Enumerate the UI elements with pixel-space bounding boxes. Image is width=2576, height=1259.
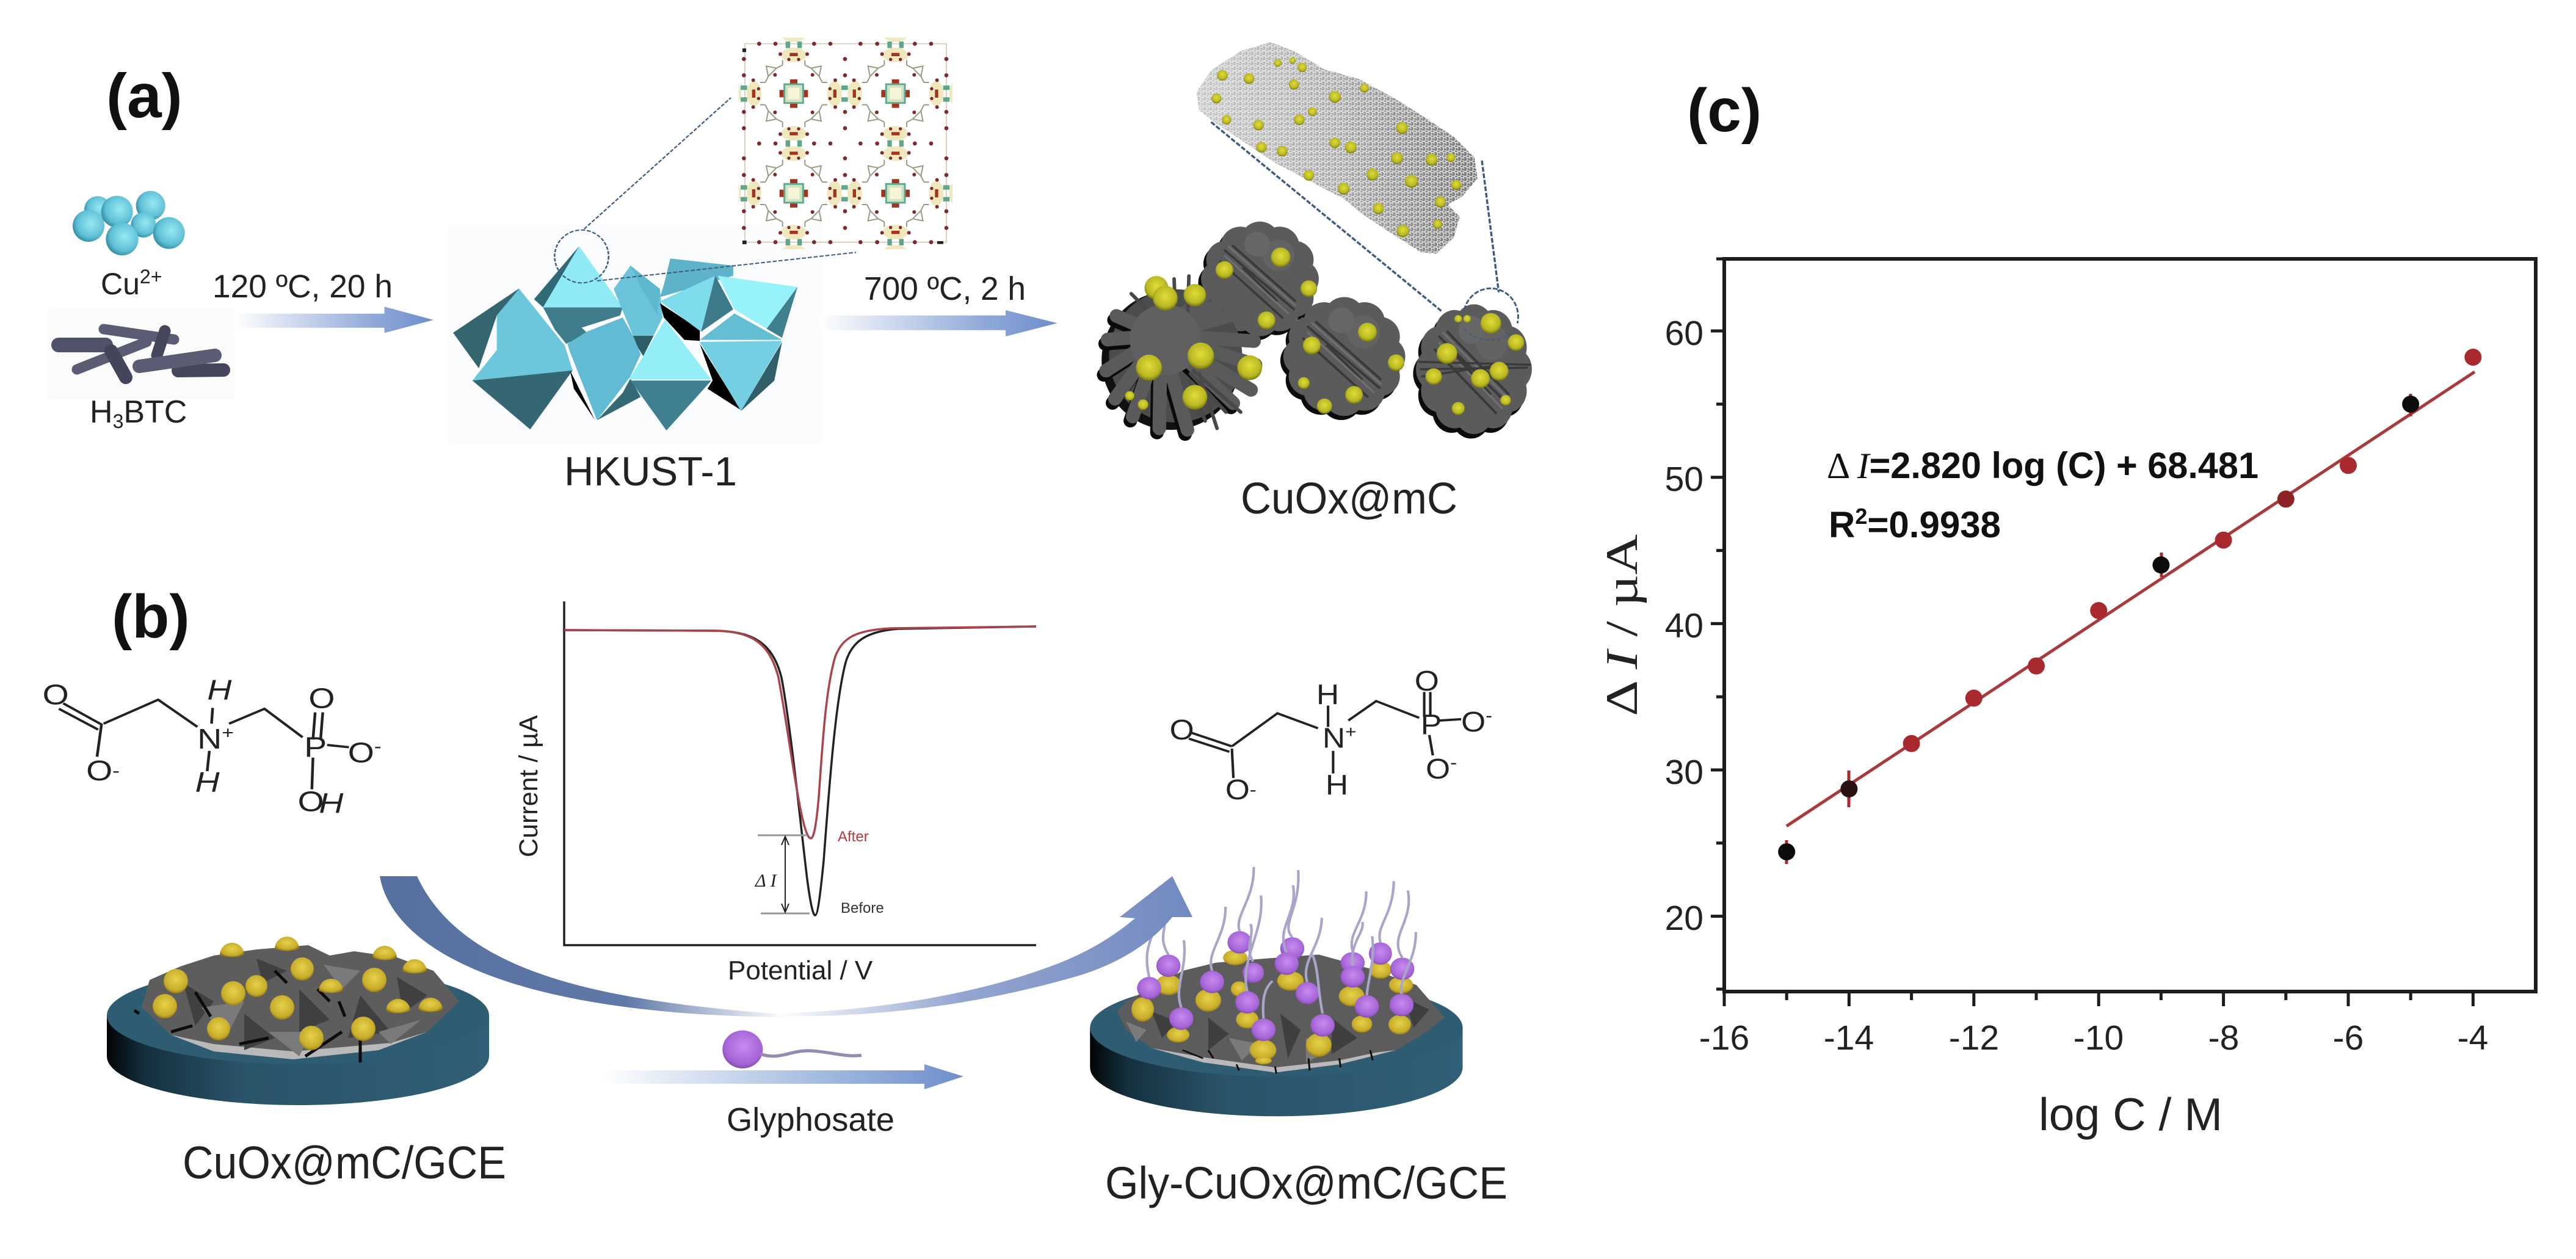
molecule: glyphosate left [43,674,382,819]
x tick labels [1699,1018,2488,1058]
y tick labels: 60 [1665,314,1703,353]
inset: HKUST-1 framework [739,38,952,249]
data points [1778,349,2481,864]
text: H3BTC: BTC [123,394,187,430]
text: HKUST-1: HKUST-1 [564,449,737,495]
x tick labels: -12 [1949,1018,1999,1058]
x tick labels: -4 [2458,1018,2488,1058]
molecule: glyphosate left: H [319,788,344,819]
text: CuOx@mC: CuOx@mC [1241,474,1457,523]
label (a): (a) [106,61,183,131]
text: Glyphosate: Glyphosate [727,1101,894,1138]
chart: voltammogram before and after [514,601,1036,985]
molecule: glyphosate left: P [304,731,327,763]
chart: voltammogram before and after: Current / µA [514,715,543,857]
molecule: glyphosate left: O [43,679,69,710]
callout: zoom lines to inset [554,98,856,283]
arrow: glyphosate step [600,1064,963,1089]
icon: H3BTC rods [46,308,234,399]
molecule: glyphosate right: O [1415,666,1439,697]
equation: Δ I=2.820 log (C) + 68.481 [1827,445,2259,486]
chart: voltammogram before and after: Before [841,900,884,916]
molecule: glyphosate right: - [1250,780,1257,800]
label (c): (c) [1687,76,1761,145]
text: 700 ºC, 2 h: 700 ºC, 2 h [864,270,1026,307]
icon: carbon tube with nanoparticles [1196,42,1478,254]
r squared: =0.9938 [1867,504,2001,545]
icon: glyphosate probe [722,1031,862,1069]
chart: calibration plot [1597,259,2536,1140]
icon: Cu2+ spheres [73,191,185,255]
x tick labels: -8 [2208,1018,2239,1058]
molecule: glyphosate left: O [86,755,112,786]
molecule: glyphosate right: H [1316,680,1339,711]
arrow: step 1 [234,307,434,333]
x tick labels: -6 [2333,1018,2364,1058]
text: H3BTC: 3 [113,410,123,432]
x tick labels: -14 [1824,1018,1874,1058]
molecule: glyphosate right: P [1421,709,1442,741]
x axis title: log C / M [2039,1089,2222,1140]
arrow: curved right with head [775,876,1192,1016]
r squared: R [1829,504,1855,545]
disk: Gly-CuOx@mC/GCE electrode [1090,867,1463,1116]
molecule: glyphosate right [1170,666,1492,805]
label (b): (b) [112,582,190,651]
molecule: glyphosate left: O [308,683,335,714]
molecule: glyphosate right: O [1426,753,1450,785]
molecule: glyphosate left: - [374,736,382,756]
molecule: glyphosate right: O [1225,775,1250,805]
text: 120 ºC, 20 h: 120 ºC, 20 h [212,269,393,305]
disk: CuOx@mC/GCE electrode [107,937,489,1105]
icon: CuOx@mC nanoparticle clusters [1101,122,1532,438]
text: Gly-CuOx@mC/GCE: Gly-CuOx@mC/GCE [1105,1158,1508,1208]
molecule: glyphosate left: - [112,760,120,780]
y tick labels: 50 [1665,460,1703,499]
molecule: glyphosate right: - [1450,752,1457,772]
molecule: glyphosate left: O [348,737,374,768]
molecule: glyphosate right: - [1486,705,1492,725]
molecule: glyphosate right: N [1322,723,1345,754]
arrow: step 2 [819,310,1058,336]
y axis title: Δ I / µA [1597,534,1647,716]
chart: voltammogram before and after: After [838,829,869,845]
molecule: glyphosate left: + [222,723,234,742]
y tick labels [1665,314,1703,938]
molecule: glyphosate left: O [298,786,324,817]
molecule: glyphosate right: O [1461,706,1486,738]
fit line [1787,372,2475,826]
text: CuOx@mC/GCE: CuOx@mC/GCE [183,1137,506,1188]
x tick labels: -10 [2073,1018,2124,1058]
axis ticks [1711,259,2473,1006]
text: H3BTC: H [90,394,113,430]
molecule: glyphosate right: H [1326,770,1348,801]
r squared: 2 [1855,504,1867,529]
molecule: glyphosate left: H [207,674,232,706]
icon: HKUST-1 octahedra crystals [447,225,823,444]
arrow: curved left fade [380,876,788,1017]
chart: voltammogram before and after: Potential / V [728,956,873,985]
y tick labels: 40 [1665,606,1703,645]
molecule: glyphosate left: H [195,767,220,798]
chart: voltammogram before and after: Δ I [755,871,778,891]
molecule: glyphosate left: N [197,723,222,755]
y tick labels: 30 [1665,753,1703,792]
text: Cu2+: Cu [101,267,140,301]
molecule: glyphosate right: + [1345,723,1357,742]
text: Cu2+: 2+ [140,266,162,288]
molecule: glyphosate right: O [1170,715,1194,746]
y tick labels: 20 [1665,899,1703,938]
x tick labels: -16 [1699,1018,1749,1058]
